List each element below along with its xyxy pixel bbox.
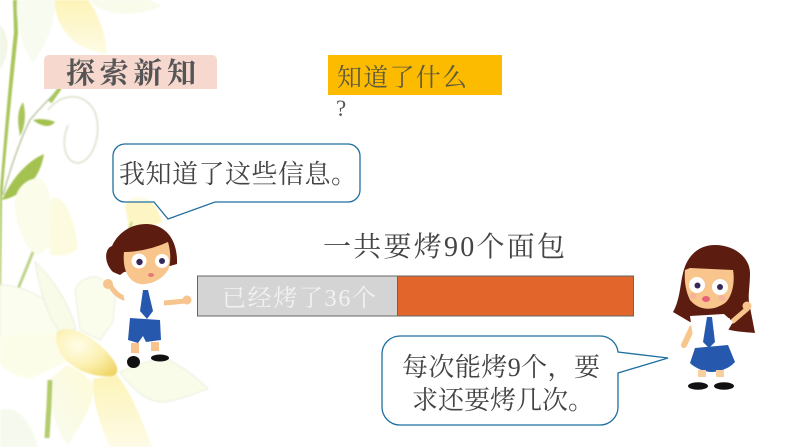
question heading: 知道了什么？: 知道了什么	[337, 64, 467, 92]
bar segment: already baked 36	[198, 276, 398, 316]
callout: girl speech bubble: 求还要烤几次。	[412, 386, 594, 415]
character: boy	[103, 224, 192, 368]
callout: boy speech bubble: 我知道了这些信息。	[119, 160, 357, 189]
section heading: 探索新知	[44, 55, 217, 90]
callout: boy speech bubble	[113, 144, 360, 219]
section heading: 探索新知: 探索新知	[66, 57, 196, 90]
character: girl	[673, 245, 755, 390]
callout: girl speech bubble	[382, 336, 668, 425]
title: 一共要烤90个面包: 一共要烤90个面包	[323, 231, 565, 263]
callout: girl speech bubble: 每次能烤9个，要	[402, 353, 600, 382]
bar segment: already baked 36: 已经烤了36个	[222, 285, 376, 312]
bar diagram: 90 loaves	[198, 276, 634, 316]
question heading: 知道了什么？	[328, 55, 502, 121]
question heading: 知道了什么？: ?	[336, 96, 346, 121]
bar segment: remaining	[398, 276, 634, 316]
background floral decoration	[0, 0, 208, 447]
